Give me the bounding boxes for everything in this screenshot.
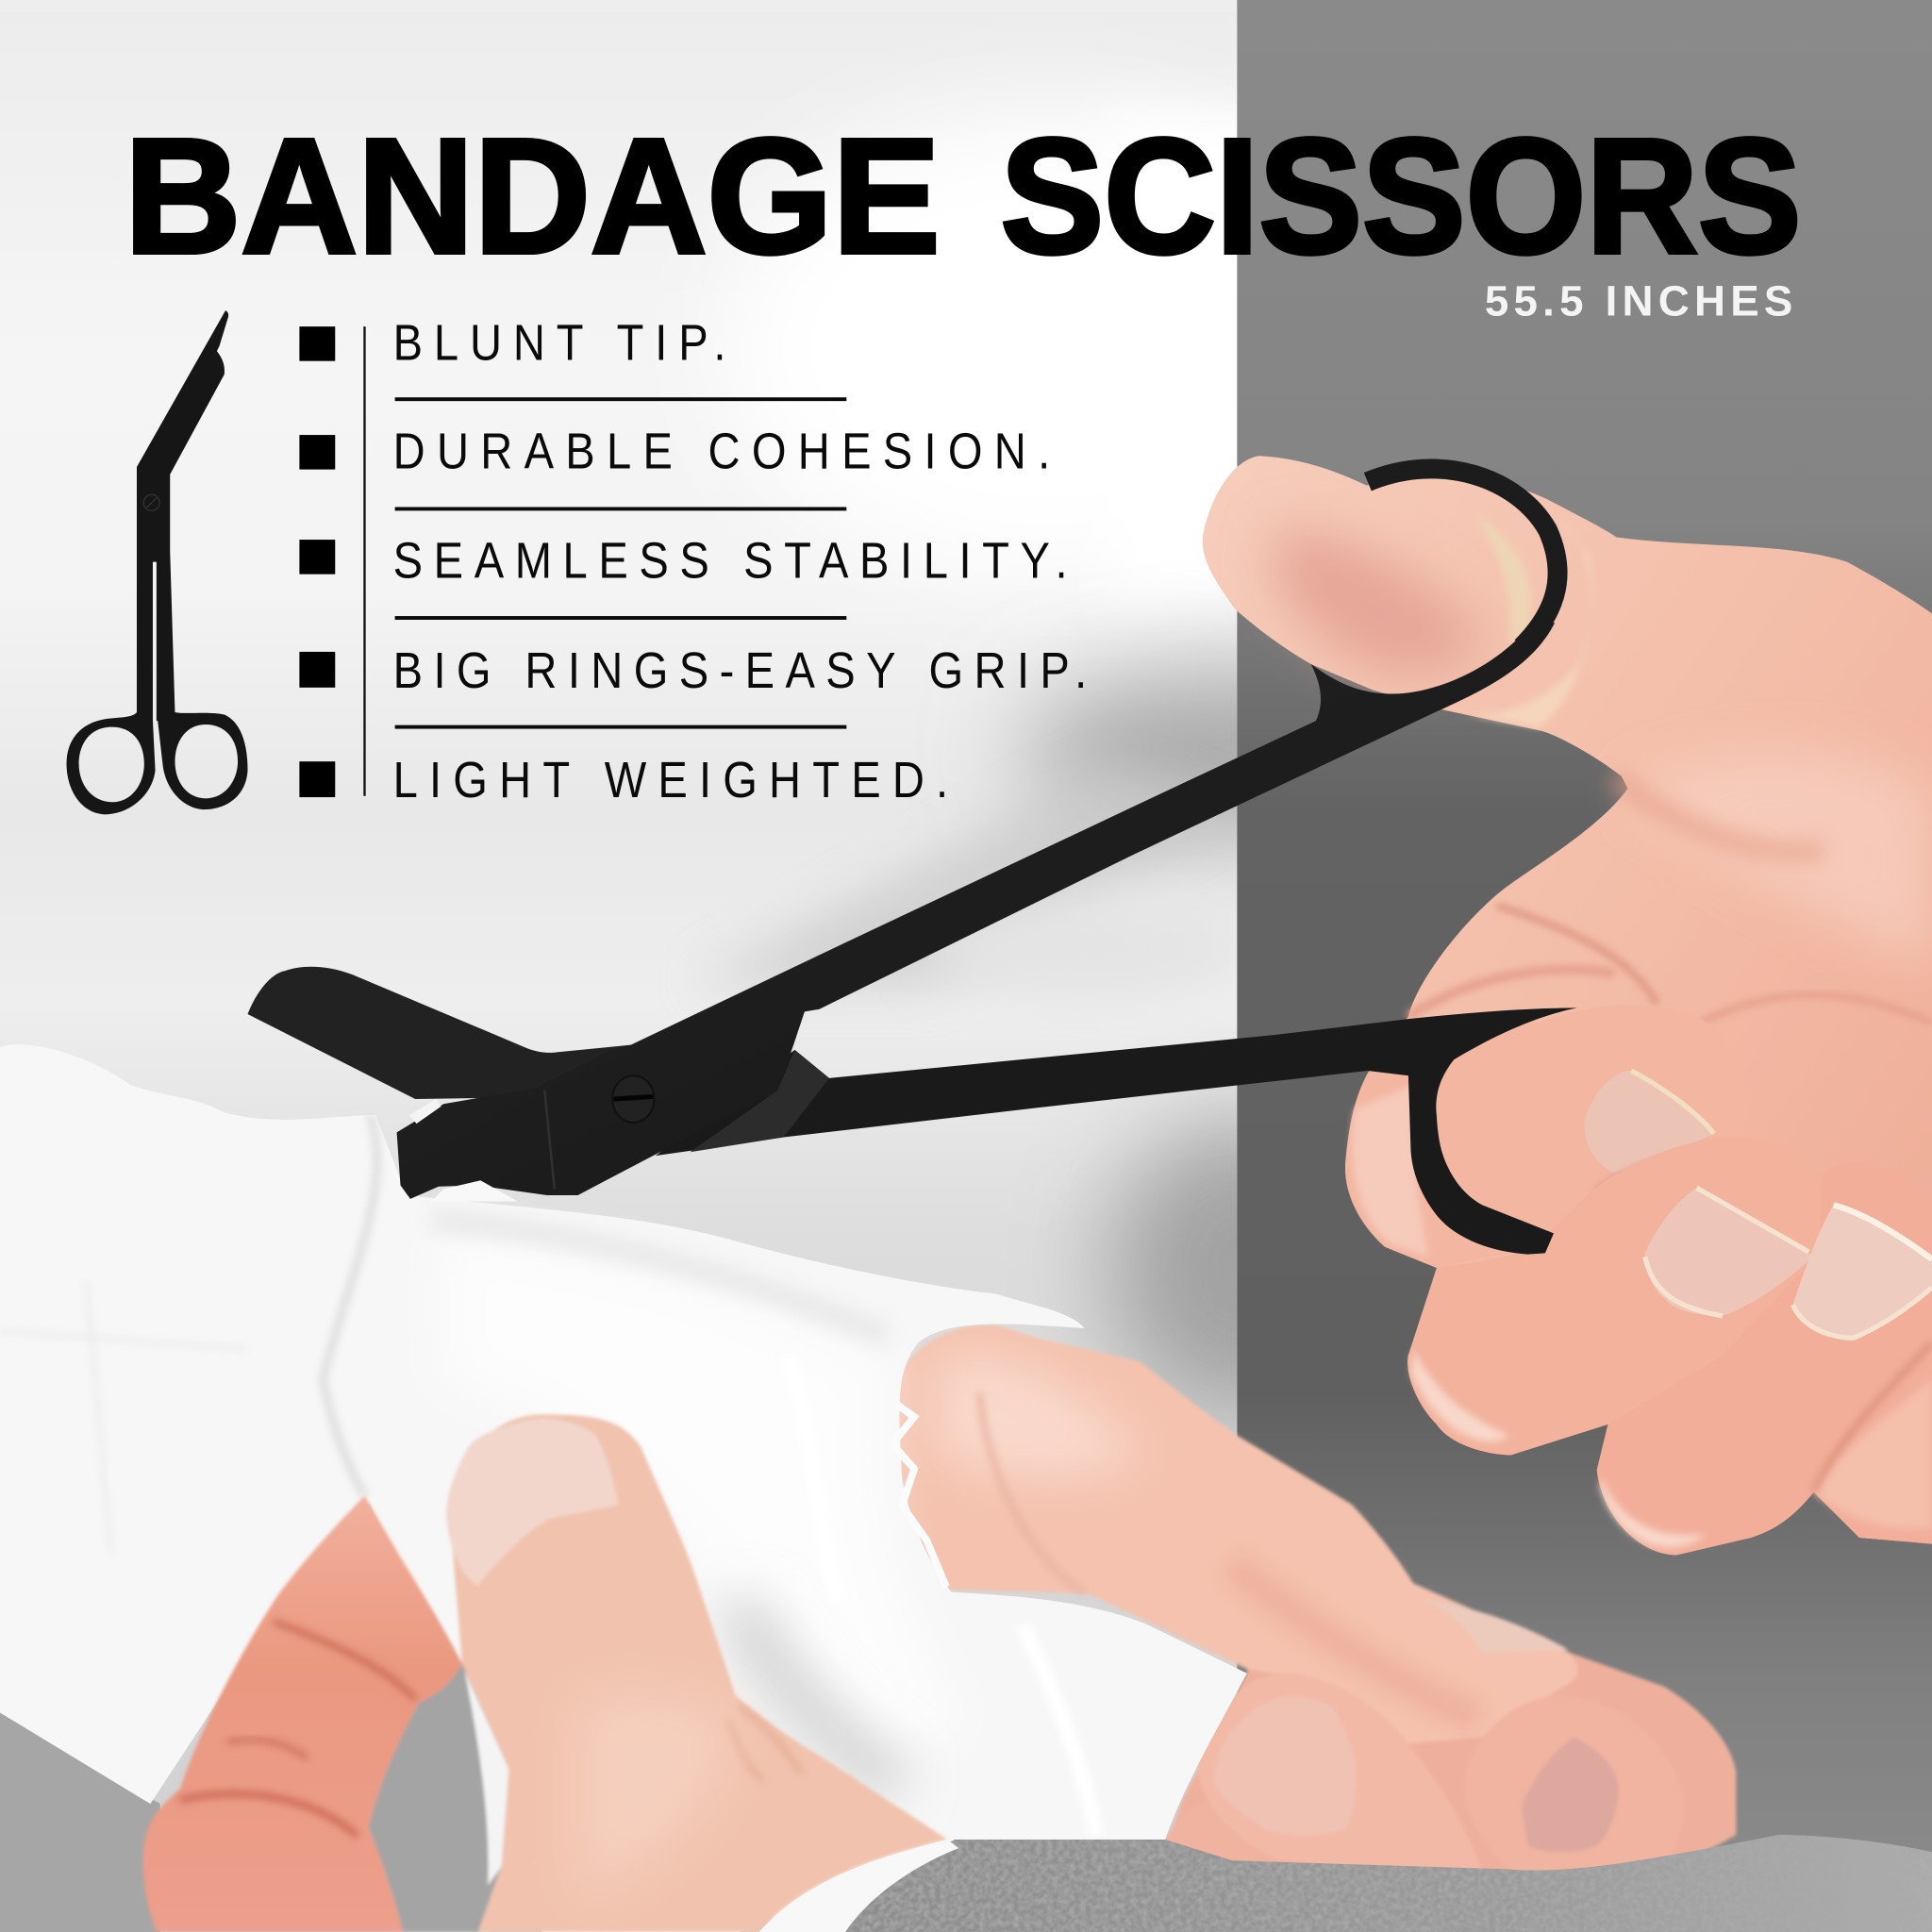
icon: small scissors (67, 310, 248, 814)
thumb (450, 1414, 947, 1932)
clinician hand (1203, 456, 1932, 1555)
thumb shading (1274, 530, 1485, 675)
grey sweater (845, 1835, 1932, 1932)
upper shank (397, 623, 1555, 1199)
grey area lower left (0, 1713, 160, 1932)
finger A (1197, 1674, 1485, 1879)
nail A (1214, 1697, 1357, 1834)
ring finger (1597, 1162, 1932, 1555)
feature bullets (299, 326, 335, 797)
nail middle (1645, 1188, 1814, 1316)
patient hand emerging from bandage (892, 1325, 1736, 1885)
lower shank and finger ring (656, 1008, 1577, 1255)
vertical divider (363, 326, 366, 796)
patient thumbnail (1414, 1601, 1569, 1653)
title (125, 105, 1802, 288)
sleeve cuff (759, 1840, 958, 1932)
feature list: DURABLE COHESION. (393, 422, 1050, 479)
small finger (1163, 1802, 1281, 1863)
patient thumb (892, 1325, 1577, 1743)
bandage (0, 1044, 1247, 1932)
title: BANDAGE (125, 105, 941, 288)
index finger (1345, 1005, 1752, 1268)
title: SCISSORS (1001, 105, 1802, 288)
panel: dark grey background (1237, 0, 1932, 1932)
grasping hand (143, 1414, 947, 1932)
feature list: LIGHT WEIGHTED. (393, 751, 948, 808)
fingers (143, 1496, 462, 1932)
pivot screw (612, 1075, 655, 1123)
feature list (393, 314, 1087, 808)
nail ring (1792, 1205, 1932, 1338)
thumb ring (1368, 469, 1557, 647)
middle finger (1407, 1138, 1827, 1456)
frayed edge (892, 1405, 946, 1587)
finger B (1464, 1695, 1683, 1883)
panel: light background (0, 0, 1238, 1932)
thumbnail (446, 1418, 619, 1586)
feature list: SEAMLESS STABILITY. (393, 532, 1068, 589)
gap between finger and thumb (369, 1663, 518, 1932)
nail B (1522, 1738, 1619, 1852)
bandage cut (409, 1099, 441, 1124)
subtitle: size: 55.5 INCHES (1485, 276, 1792, 325)
feature list: BLUNT TIP. (393, 314, 726, 371)
feature list: BIG RINGS-EASY GRIP. (393, 641, 1087, 698)
large scissors (248, 469, 1577, 1255)
horizontal dividers (395, 397, 846, 729)
angled lower blade (248, 967, 631, 1099)
palm shading (1626, 752, 1932, 974)
nail index (1585, 1071, 1714, 1173)
